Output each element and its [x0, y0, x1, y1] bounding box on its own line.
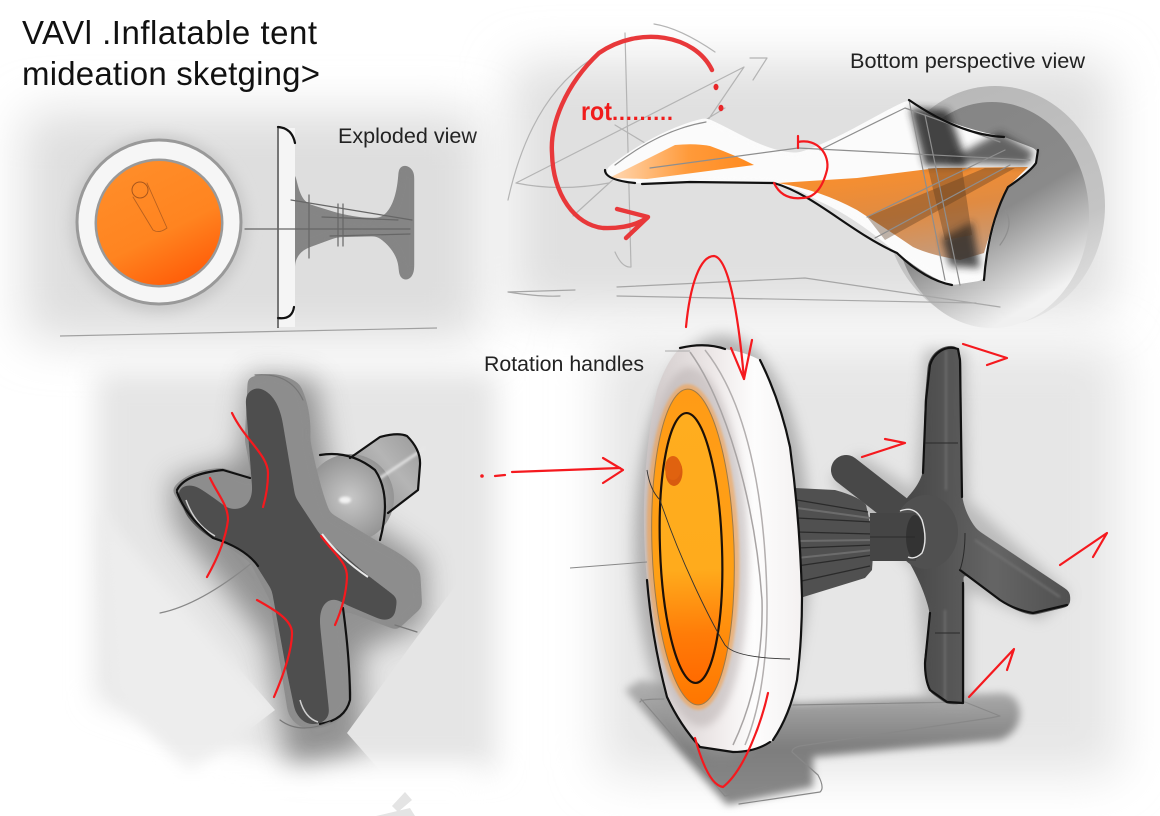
- icon: front disc: [71, 136, 247, 312]
- tent cross shading: [867, 108, 1034, 268]
- big rotation arrow: [552, 37, 712, 238]
- cross drop shadow: [170, 375, 425, 775]
- title: [22, 14, 320, 92]
- panel background: [512, 62, 1112, 312]
- icon: rotation cross: [172, 374, 422, 729]
- label: bottom perspective view: Bottom perspective view: [850, 50, 1086, 73]
- transition arrow: [480, 458, 623, 483]
- left light plane: [100, 510, 275, 775]
- tent outline: [605, 100, 1038, 285]
- red cut lines: [207, 413, 347, 697]
- wheel: [570, 345, 802, 752]
- panel: bottom perspective view: [508, 24, 1112, 328]
- ground lines: [508, 278, 1000, 307]
- side profile view: [245, 127, 414, 328]
- label: rotation handles: Rotation handles: [484, 353, 644, 376]
- hub collar: [870, 495, 958, 569]
- label: rot: [581, 96, 673, 126]
- label: exploded view: Exploded view: [338, 125, 478, 148]
- icon: rear hub: [306, 434, 425, 542]
- baseline: [60, 328, 437, 336]
- panel: cross handle view: [96, 372, 496, 816]
- fade at bottom: [120, 768, 480, 816]
- construction sketch lines: [508, 24, 767, 267]
- label: rot: rot: [581, 96, 612, 126]
- panel: rotation handles view: [480, 256, 1120, 805]
- tent body: [605, 100, 1038, 285]
- title: mideation sketging>: [22, 55, 320, 92]
- ground outline: [640, 699, 1000, 804]
- tent sketch strokes: [615, 100, 1030, 285]
- title: VAVl .Inflatable tent: [22, 14, 317, 51]
- wheel shadow: [634, 335, 810, 755]
- tent orange panels: [609, 144, 1028, 260]
- small twist arrow: [774, 136, 827, 198]
- panel background: [24, 112, 482, 340]
- ground shadow: [625, 680, 1020, 805]
- ground arc: [160, 562, 253, 613]
- panel: exploded view: [24, 112, 482, 340]
- shards: [376, 792, 415, 816]
- shadow ring: [885, 86, 1105, 328]
- cross handle: [846, 346, 1070, 704]
- cross arms shadow: [830, 350, 1070, 705]
- orange lens: [647, 388, 739, 706]
- panel background: [96, 372, 496, 770]
- label: rot: .........: [612, 100, 673, 125]
- panel background: [600, 345, 1120, 775]
- red motion arrows: [686, 256, 1107, 787]
- ribbed body: [795, 488, 874, 598]
- red dots: [714, 84, 724, 111]
